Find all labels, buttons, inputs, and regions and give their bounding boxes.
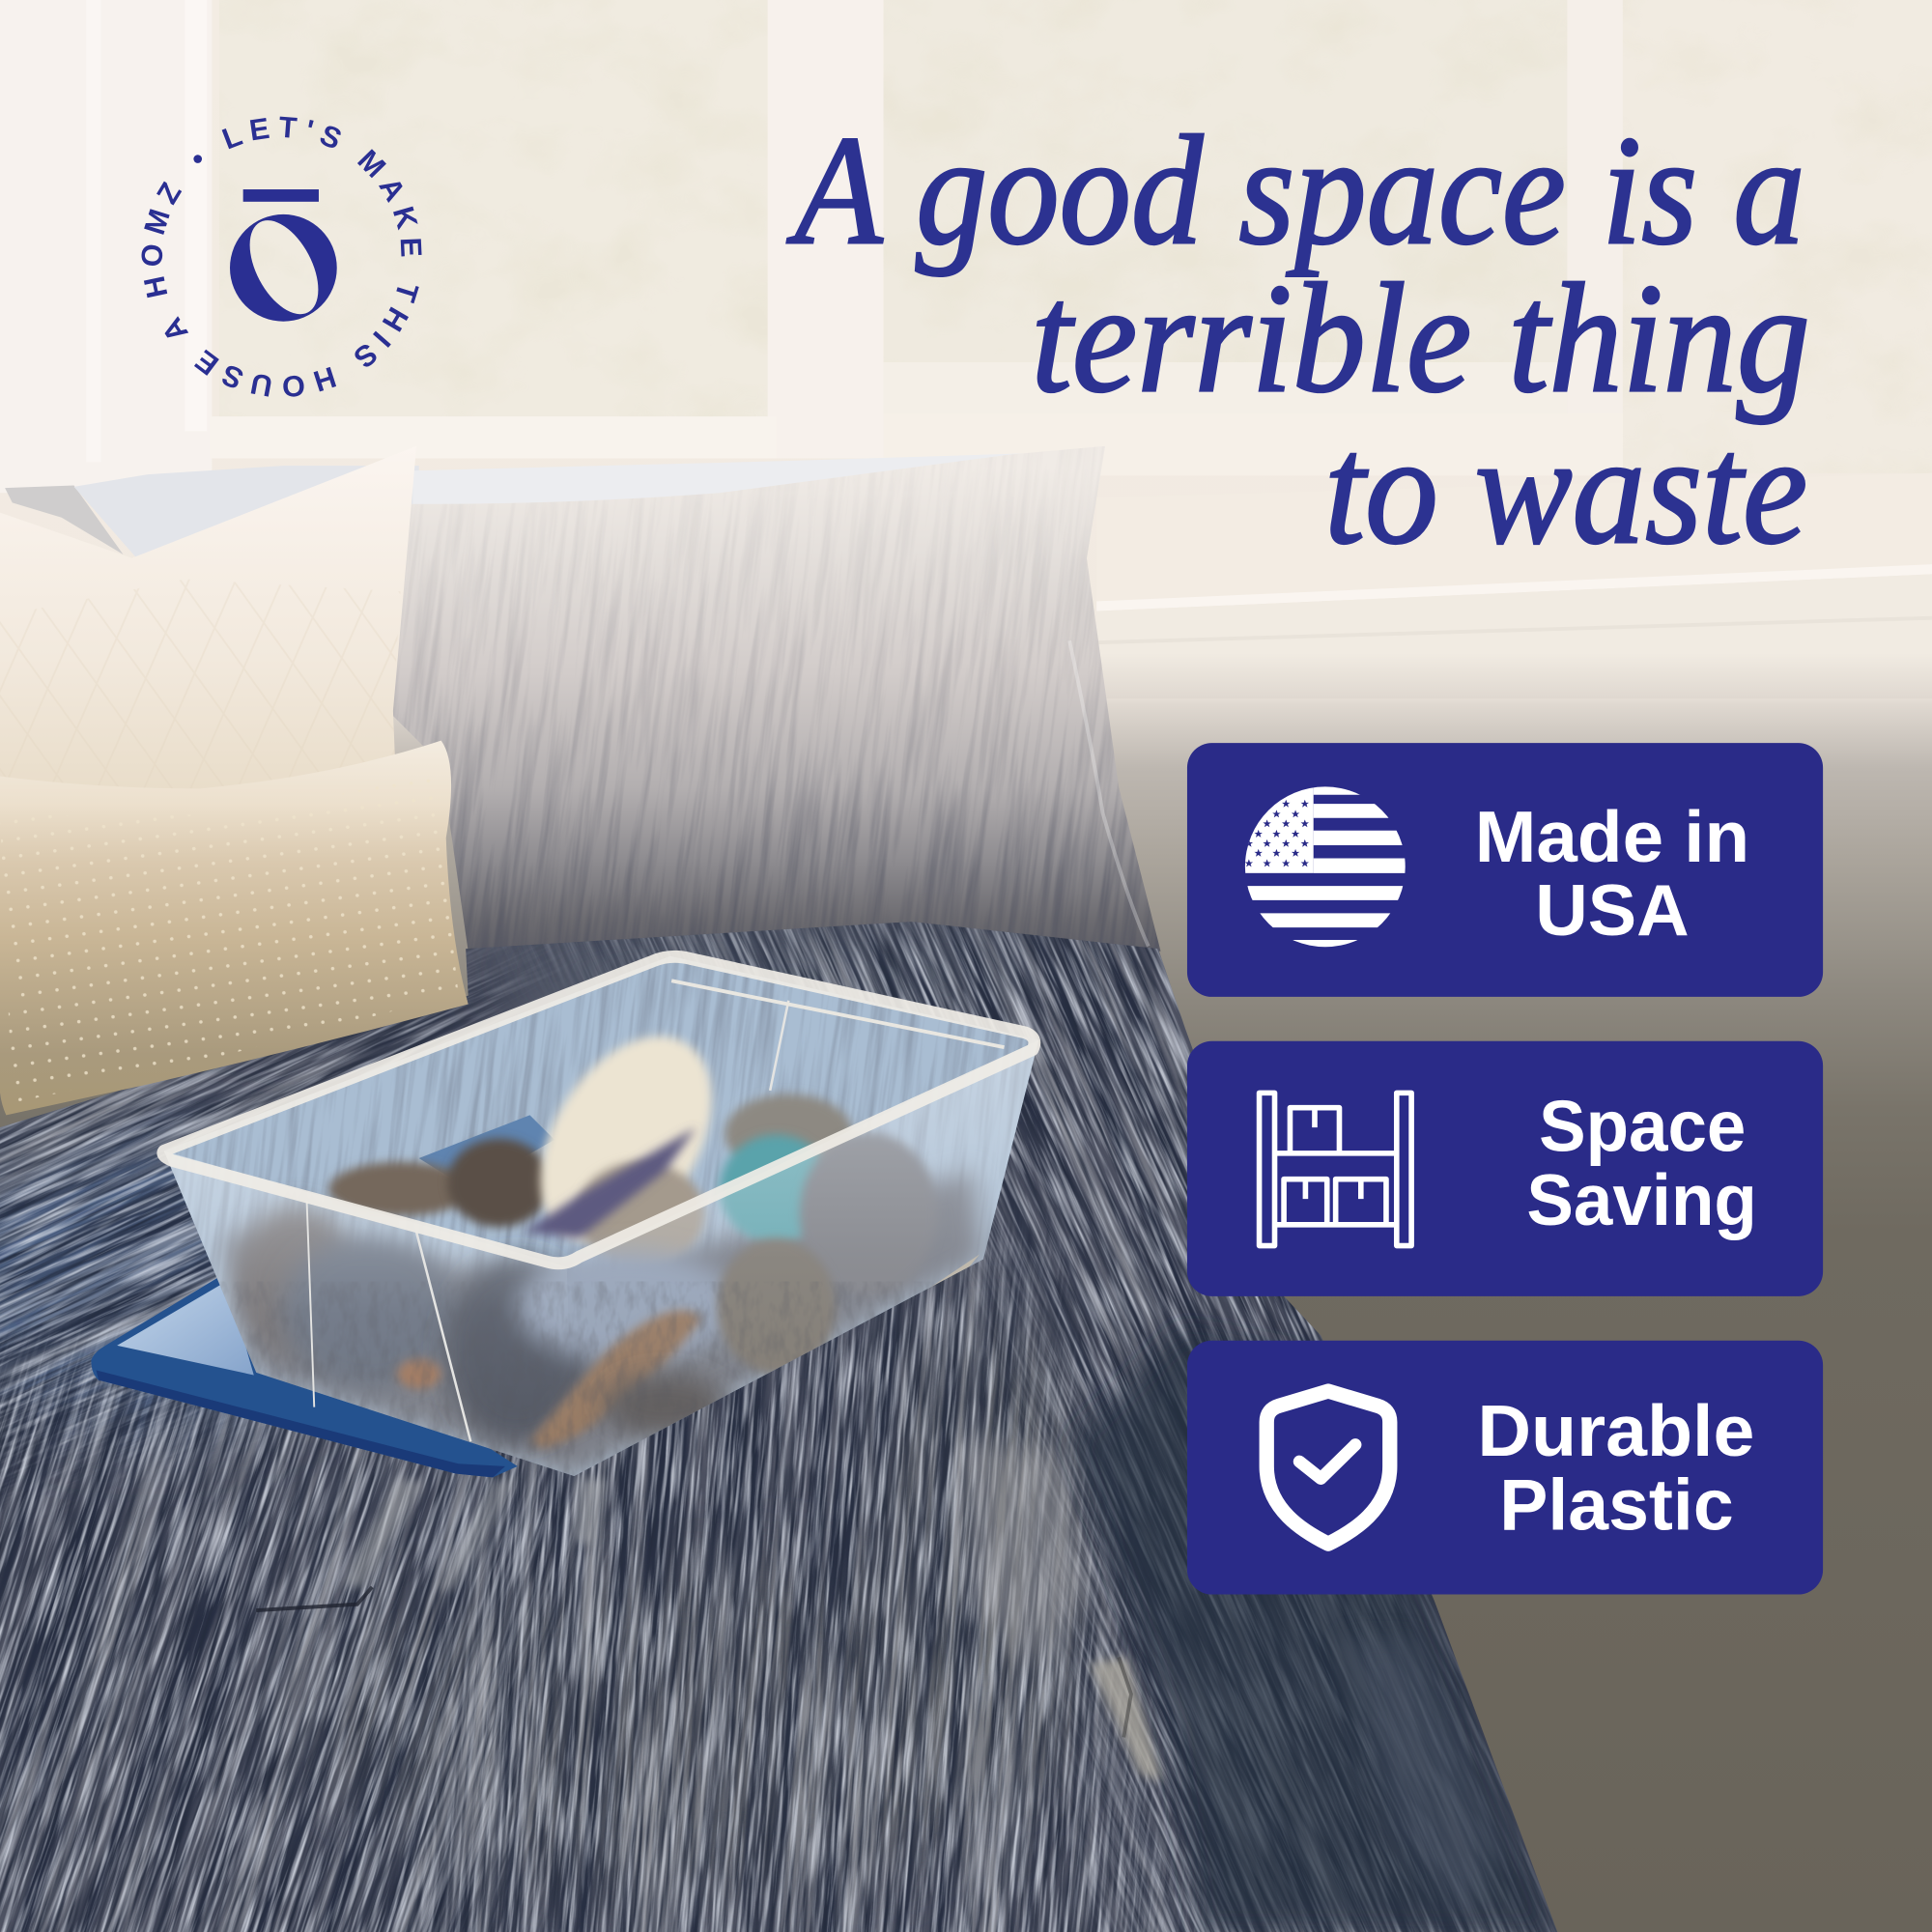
window with panes and frame xyxy=(0,0,1932,698)
panel: space saving xyxy=(1187,1041,1823,1296)
logo dot xyxy=(193,155,202,163)
label: durable plastic: Plastic xyxy=(1499,1464,1734,1546)
headline: terrible thing xyxy=(1032,252,1810,425)
dark fold on the right side of the bed xyxy=(1072,1331,1557,1932)
panel: durable plastic xyxy=(1187,1341,1823,1595)
pillow: cream back pillow xyxy=(0,446,416,801)
logo: circular badge xyxy=(141,116,421,397)
icon: storage shelf with boxes xyxy=(1260,1093,1411,1246)
label: space saving xyxy=(1526,1085,1757,1240)
label: made in USA xyxy=(1475,796,1749,951)
icon: US flag circle xyxy=(1244,786,1406,947)
yarn balls xyxy=(218,1031,980,1476)
headline xyxy=(786,104,1810,577)
bed with blue textured comforter xyxy=(0,912,1602,1932)
translucent front faces xyxy=(164,1151,574,1476)
label: durable plastic: Durable xyxy=(1477,1390,1754,1471)
panel: made in USA xyxy=(1187,743,1823,997)
logo letter o xyxy=(230,214,337,322)
storage box with yarn xyxy=(124,949,1060,1491)
label: made in USA: USA xyxy=(1535,869,1690,951)
pillow: large slate pillow xyxy=(393,446,1161,952)
label: made in USA: Made in xyxy=(1475,796,1749,877)
logo bar xyxy=(243,189,319,202)
back cushion hint behind pillows xyxy=(0,453,1023,777)
label: durable plastic xyxy=(1477,1390,1754,1546)
crease and light streaks near the lid xyxy=(256,1587,372,1610)
logo ring text: LET'S MAKE THIS HOUSE A HOMZ xyxy=(141,116,421,397)
icon: shield with check xyxy=(1266,1391,1390,1544)
headline: to waste xyxy=(1324,404,1807,577)
label: space saving: Saving xyxy=(1526,1159,1757,1240)
label: space saving: Space xyxy=(1539,1085,1746,1166)
storage box lid xyxy=(91,1275,518,1477)
headline: A good space is a xyxy=(786,104,1805,277)
pillow: beige dotted front pillow xyxy=(0,741,469,1115)
